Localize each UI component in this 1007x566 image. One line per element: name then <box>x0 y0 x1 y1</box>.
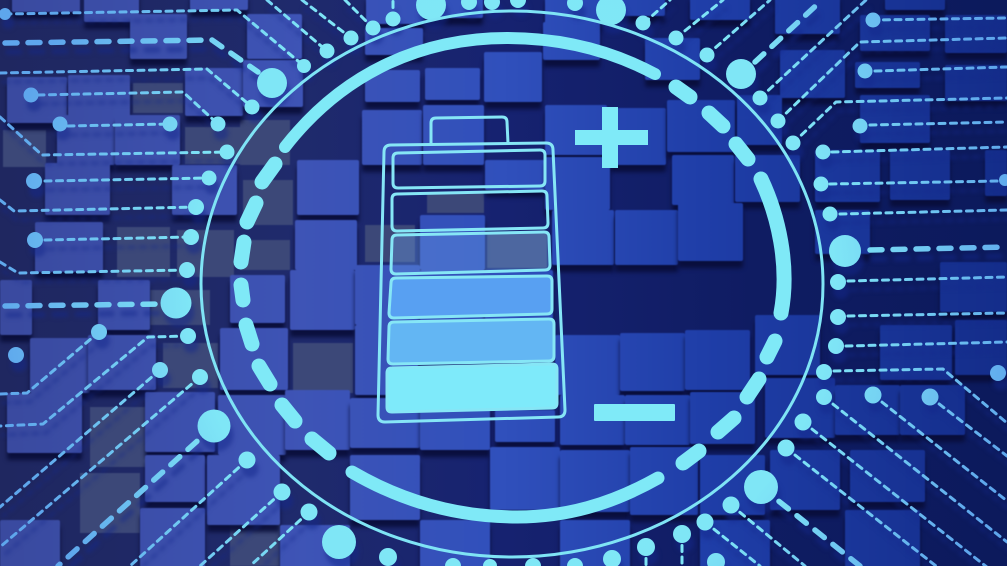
icon: minus sign <box>594 404 675 421</box>
cell 4 medium <box>389 276 552 318</box>
battery cap <box>431 117 508 144</box>
segmented thick ring <box>241 38 784 517</box>
cell 3 faint <box>391 232 550 274</box>
right arc <box>761 179 784 313</box>
left circuit lines <box>0 0 393 566</box>
cell 5 bright <box>388 319 554 364</box>
cell 6 full <box>387 364 557 412</box>
ring dashes <box>241 87 775 463</box>
icon: battery <box>378 117 565 422</box>
cell 2 empty <box>392 191 548 231</box>
thin outer ring <box>201 11 823 557</box>
icon: plus sign <box>575 107 648 168</box>
battery body <box>378 143 565 422</box>
bottom arc <box>352 472 658 517</box>
top arc <box>285 38 655 147</box>
cell 1 empty <box>393 150 545 188</box>
right circuit lines <box>644 0 1007 566</box>
background: grey recessed cube tops <box>3 83 547 566</box>
